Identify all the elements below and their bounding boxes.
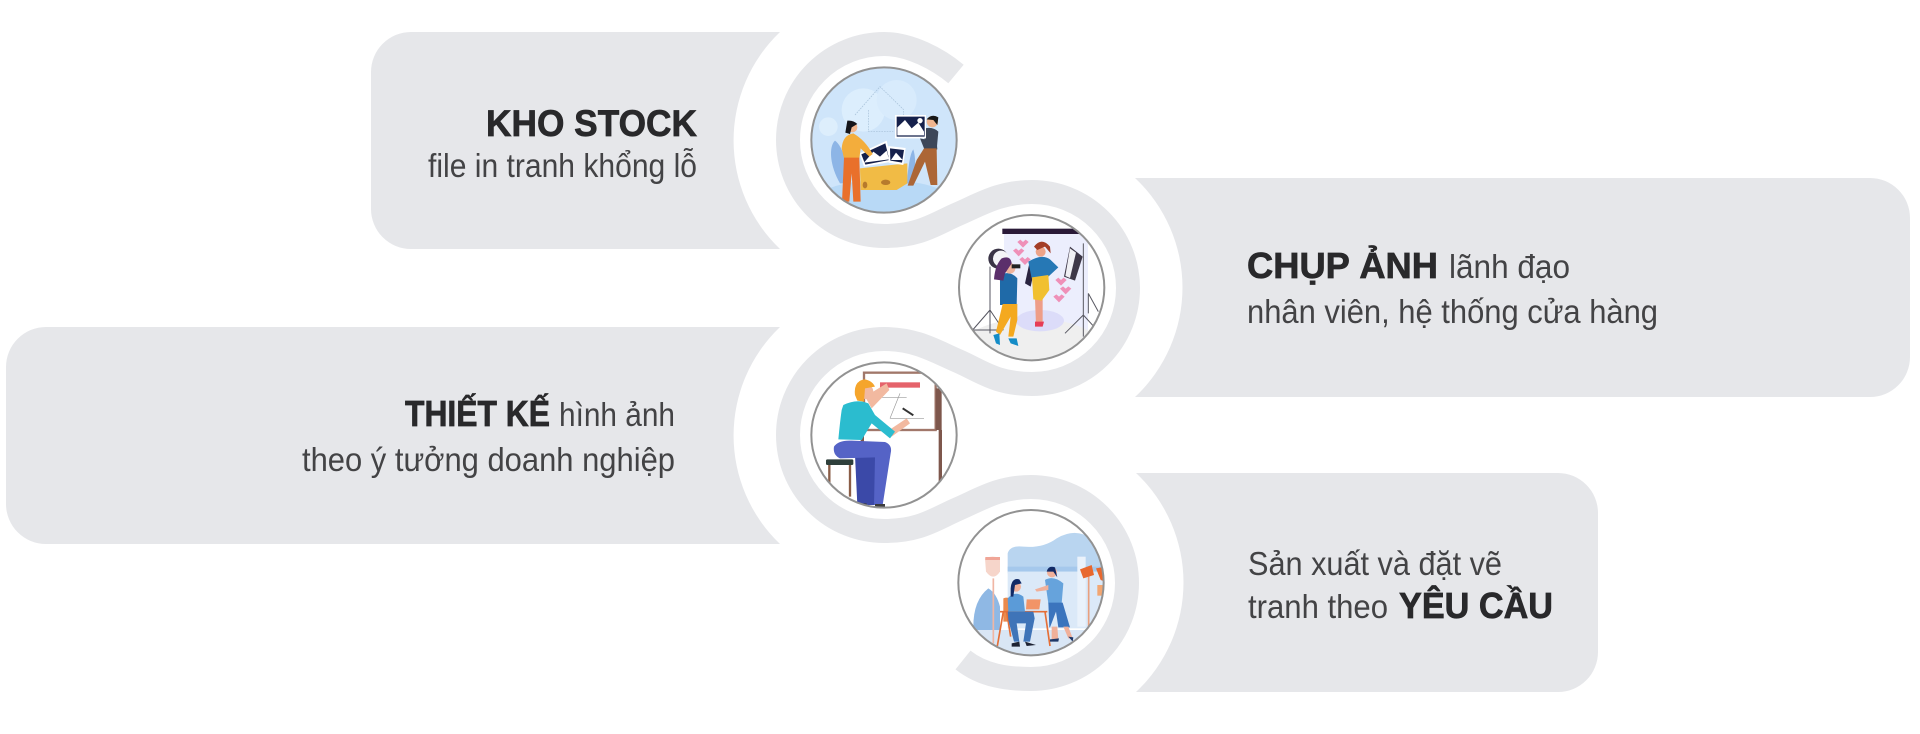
panel background (1135, 178, 1910, 397)
text: theo ý tưởng doanh nghiệp: theo ý tưởng doanh nghiệp (302, 441, 675, 478)
text: Sản xuất và đặt vẽ: Sản xuất và đặt vẽ (1248, 545, 1502, 582)
panel background (371, 32, 780, 249)
text: lãnh đạo: lãnh đạo (1449, 248, 1570, 285)
ribbon connecting the four circles (788, 44, 1128, 679)
text: file in tranh khổng lỗ: file in tranh khổng lỗ (428, 147, 697, 184)
text: nhân viên, hệ thống cửa hàng: nhân viên, hệ thống cửa hàng (1247, 293, 1658, 330)
panel background (1136, 473, 1598, 692)
panel: kho stock (371, 32, 780, 249)
text: hình ảnh: hình ảnh (559, 396, 675, 433)
heading: CHỤP ẢNH: CHỤP ẢNH (1247, 245, 1438, 286)
panel background (6, 327, 780, 544)
icon: designer at drawing board illustration (811, 362, 957, 508)
icon: photo studio illustration (959, 215, 1104, 378)
icon: stock photos illustration (811, 67, 957, 220)
text: tranh theo: tranh theo (1248, 588, 1388, 625)
panel: thiết kế (6, 327, 780, 544)
panel: chụp ảnh (1135, 178, 1910, 397)
heading: YÊU CẦU: YÊU CẦU (1399, 584, 1553, 626)
icon: meeting and ordering illustration (958, 510, 1107, 657)
heading: KHO STOCK: KHO STOCK (486, 103, 697, 144)
panel: yêu cầu (1136, 473, 1598, 692)
heading: THIẾT KẾ: THIẾT KẾ (405, 393, 550, 434)
